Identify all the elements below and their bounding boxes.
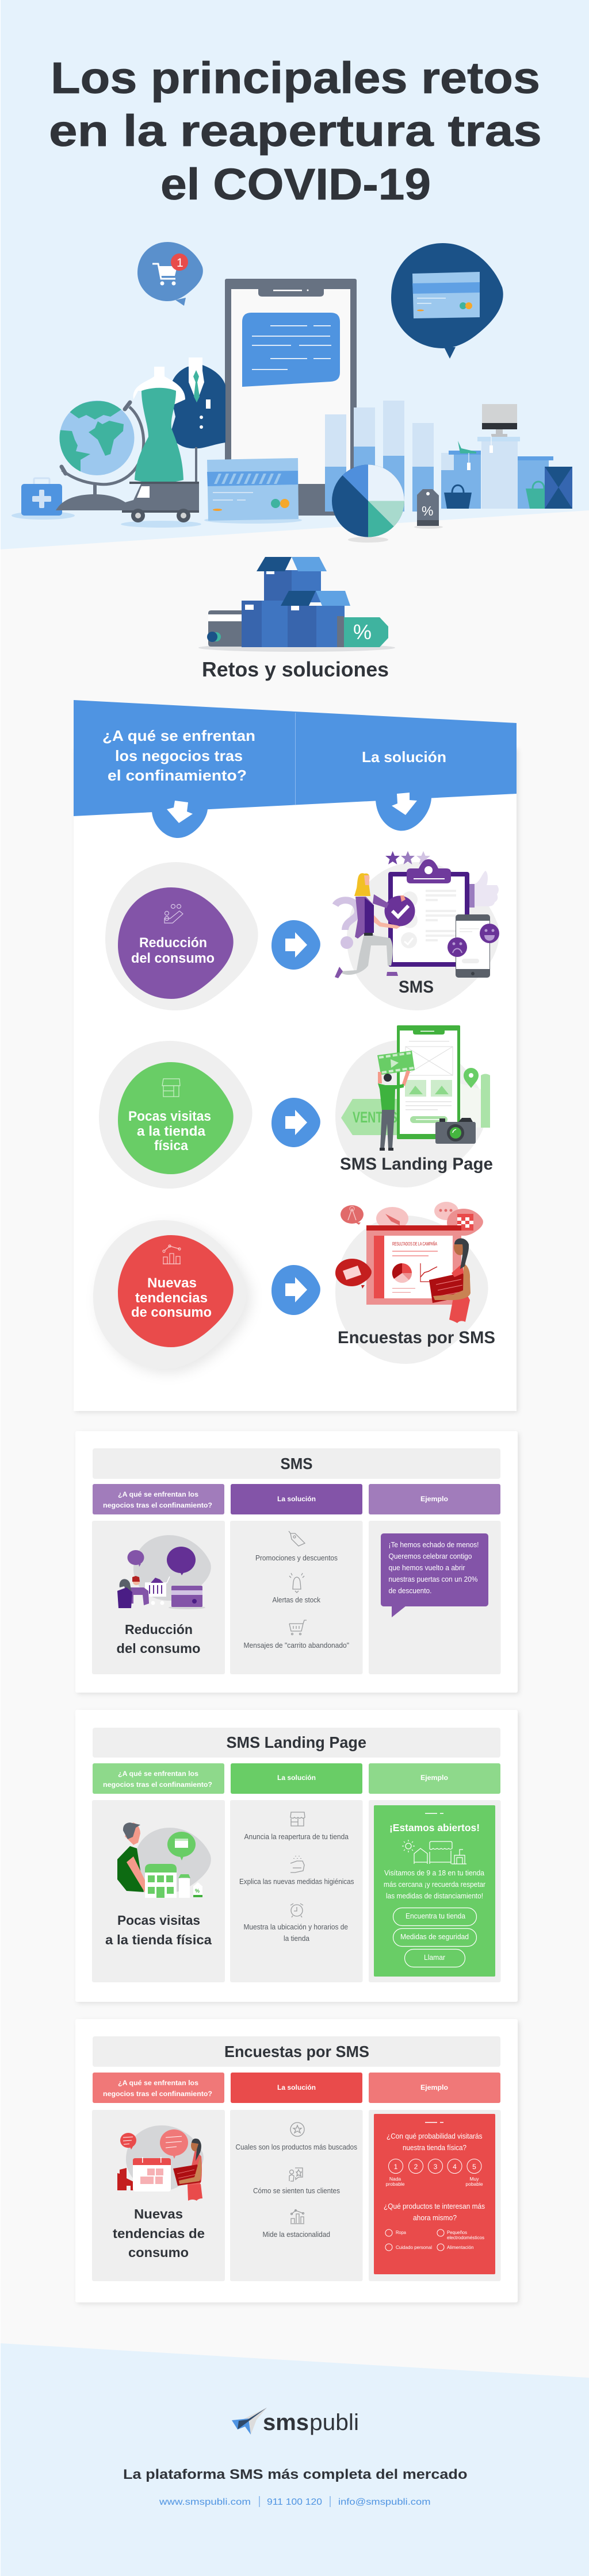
text: muestra: [244, 1923, 348, 1943]
column headers: [93, 1484, 500, 1514]
panel title: [93, 1448, 500, 1479]
rating scale: Nada: [389, 2176, 401, 2182]
challenge column: %: [195, 1888, 200, 1894]
panel: SMS detail card: [75, 1431, 518, 1693]
example column: nuestra tienda física?: [403, 2144, 466, 2152]
arrow: [271, 1098, 320, 1147]
example column: ¿Con qué probabilidad visitarás: [387, 2132, 482, 2140]
delivery truck: [121, 482, 201, 528]
text: cuales: Cuales son los productos más buscados: [236, 2143, 357, 2151]
solution: SMS illustration: [335, 851, 499, 1010]
column headers: La solución: [277, 1495, 316, 1503]
rating scale: 4: [453, 2163, 457, 2171]
column headers: negocios tras el confinamiento?: [103, 1501, 212, 1509]
challenge column: consumo: [128, 2245, 189, 2260]
tagline: La plataforma SMS más completa del mercado: [123, 2467, 467, 2482]
table header: [74, 700, 517, 838]
logo: [232, 2408, 359, 2435]
example column: ¡Te hemos echado de menos!: [389, 1541, 479, 1549]
label: SMS Landing Page: SMS Landing Page: [340, 1155, 493, 1174]
footer: [123, 2408, 467, 2507]
column headers: ¿A qué se enfrentan los: [118, 1770, 198, 1778]
example column: más cercana ¡y recuerda respetar: [384, 1881, 485, 1889]
phone: [225, 279, 357, 516]
rating scale: [385, 2159, 483, 2187]
title: el COVID-19: [160, 160, 431, 209]
dress mannequin: [133, 367, 197, 483]
text: muestra: Muestra la ubicación y horarios de: [244, 1923, 348, 1931]
logo: publi: [309, 2410, 359, 2435]
icon: clock: [290, 1904, 303, 1917]
challenge: pocas visitas: a la tienda: [137, 1124, 205, 1139]
challenge column: a la tienda física: [105, 1932, 212, 1947]
challenge: pocas visitas: física: [154, 1138, 188, 1154]
icon: price tag: [414, 489, 443, 529]
title: en la reapertura tras: [49, 106, 542, 156]
globe: [56, 401, 144, 510]
challenge column: [92, 1800, 225, 1982]
survey options: [385, 2229, 484, 2251]
table header: ¿A qué se enfrentan: [102, 727, 255, 744]
hero illustration: [12, 242, 572, 543]
solution: encuestas illustration: RESULTADOS DE LA CAMPAÑA: [392, 1241, 437, 1247]
example column: Visítamos de 9 a 18 en tu tienda: [384, 1869, 484, 1877]
icon: star circle: [290, 2123, 304, 2136]
rating scale: probable: [385, 2181, 405, 2187]
column headers: La solución: [277, 1774, 316, 1782]
example column: [369, 1521, 500, 1674]
icon: bell: [289, 1573, 304, 1593]
solution column: [230, 2110, 362, 2281]
panel title: Encuestas por SMS: [224, 2043, 369, 2060]
example column: que hemos vuelto a abrir: [389, 1564, 465, 1572]
button: medidas: [393, 1929, 476, 1946]
icon: boxes: %: [353, 620, 372, 644]
rating scale: pobable: [465, 2181, 483, 2187]
solution: landing page illustration: VENTAS: [353, 1109, 397, 1126]
solution: encuestas illustration: [335, 1202, 488, 1364]
title: Los principales retos: [51, 53, 540, 103]
icon: credit card bubble: [391, 243, 503, 359]
contact details: info@smspubli.com: [338, 2497, 430, 2507]
rating scale: Muy: [469, 2176, 479, 2182]
text: explica: Explica las nuevas medidas higiénicas: [239, 1878, 354, 1886]
icon: price tag: %: [422, 503, 433, 518]
column headers: Ejemplo: [420, 2083, 448, 2091]
text: como: Cómo se sienten tus clientes: [253, 2187, 340, 2195]
panel: challenges and solutions: [74, 700, 517, 1411]
challenge column: [92, 2110, 225, 2281]
contact details: [159, 2496, 430, 2507]
example column: nuestras puertas con un 20%: [389, 1575, 477, 1583]
text: muestra: la tienda: [284, 1935, 309, 1943]
column headers: negocios tras el confinamiento?: [103, 1781, 212, 1789]
arrow: [271, 1265, 320, 1315]
panel title: SMS: [281, 1455, 313, 1472]
example column: [369, 1800, 500, 1982]
shop boxes and monitor: [441, 404, 572, 509]
column headers: La solución: [277, 2083, 316, 2091]
column headers: Ejemplo: [420, 1495, 448, 1503]
challenge column: Reducción: [125, 1622, 193, 1637]
icon: cart bubble: [137, 242, 203, 306]
contact details: 911 100 120: [267, 2497, 322, 2507]
challenge: nuevas tendencias: tendencias: [135, 1290, 208, 1306]
credit card: [204, 458, 302, 524]
text: alertas: Alertas de stock: [273, 1596, 321, 1604]
panel: SMS landing page detail card: [75, 1710, 518, 2002]
table header: los negocios tras: [115, 747, 243, 764]
icon: boxes: [198, 557, 395, 652]
first aid kit: [12, 478, 75, 520]
icon: city shops: [402, 1840, 466, 1864]
text: promociones: Promociones y descuentos: [255, 1554, 338, 1562]
challenge: reducción del consumo: [105, 862, 258, 1010]
column headers: negocios tras el confinamiento?: [103, 2090, 212, 2098]
rating scale: 2: [414, 2163, 418, 2171]
challenge: pocas visitas: [99, 1041, 253, 1189]
panel title: [93, 1728, 500, 1758]
challenge: nuevas tendencias: [93, 1220, 247, 1369]
challenge column: Nuevas: [134, 2206, 183, 2221]
label: encuestas por SMS: Encuestas por SMS: [338, 1328, 495, 1347]
column headers: ¿A qué se enfrentan los: [118, 1490, 198, 1498]
solution column: [230, 1800, 362, 1982]
button: medidas: Medidas de seguridad: [400, 1933, 469, 1941]
text: mensajes: Mensajes de "carrito abandonado": [244, 1641, 349, 1650]
challenge: nuevas tendencias: de consumo: [131, 1305, 212, 1320]
example column: de descuento.: [389, 1587, 431, 1595]
column headers: Ejemplo: [420, 1774, 448, 1782]
example column: ¡Estamos abiertos!: [389, 1822, 480, 1833]
challenge: nuevas tendencias: Nuevas: [147, 1275, 197, 1291]
challenge column: Pocas visitas: [117, 1913, 200, 1928]
challenge column: tendencias de: [113, 2226, 205, 2241]
label: SMS: SMS: [399, 978, 434, 997]
panel: encuestas por SMS detail card: [75, 2019, 518, 2302]
example column: ¿Qué productos te interesan más: [384, 2202, 485, 2210]
icon: washing hands: [290, 1856, 304, 1873]
button: encuentra: [393, 1908, 476, 1925]
survey options: Cuidado personal: [396, 2244, 432, 2250]
survey options: Alimentación: [447, 2244, 474, 2250]
text: anuncia: Anuncia la reapertura de tu tienda: [244, 1833, 349, 1841]
bar chart: [325, 401, 434, 512]
contact details: www.smspubli.com: [159, 2497, 251, 2507]
icon: cart: [289, 1620, 307, 1635]
panel title: [93, 2036, 500, 2067]
column headers: [93, 2073, 500, 2103]
example column: [369, 2110, 500, 2281]
icon: customer opinion: [289, 2168, 303, 2181]
solution column: [230, 1521, 362, 1674]
icon: cart bubble: 1: [177, 256, 183, 270]
icon: store: [290, 1812, 305, 1826]
example column: Queremos celebrar contigo: [389, 1552, 472, 1560]
table header: La solución: [362, 748, 446, 766]
rating scale: 1: [394, 2163, 398, 2171]
column headers: [93, 1763, 500, 1794]
column headers: ¿A qué se enfrentan los: [118, 2079, 198, 2087]
challenge column: [92, 1521, 225, 1674]
challenge: reducción del consumo: Reducción: [139, 935, 207, 951]
table header: el confinamiento?: [108, 767, 247, 784]
survey options: Pequeños: [447, 2229, 467, 2235]
rating scale: 5: [472, 2163, 476, 2171]
text: mide: Mide la estacionalidad: [262, 2231, 330, 2239]
heading: retos y soluciones: Retos y soluciones: [202, 658, 389, 681]
icon: seasonality chart: [290, 2209, 304, 2224]
example column: ahora mismo?: [413, 2214, 457, 2222]
icon: tag: [289, 1531, 305, 1546]
solution: landing page illustration: [335, 1025, 490, 1187]
pie chart: [332, 464, 404, 543]
challenge column: del consumo: [116, 1641, 200, 1656]
challenge: pocas visitas: Pocas visitas: [128, 1109, 211, 1124]
survey options: Ropa: [396, 2229, 406, 2235]
title: [49, 53, 542, 209]
panel title: SMS Landing Page: [227, 1733, 366, 1751]
logo: sms: [263, 2410, 309, 2435]
button: llamar: Llamar: [424, 1954, 445, 1962]
button: llamar: [405, 1950, 465, 1967]
example column: las medidas de distanciamiento!: [386, 1892, 483, 1900]
suit on hanger: [170, 357, 225, 448]
arrow: [271, 920, 320, 970]
challenge: reducción del consumo: del consumo: [131, 951, 215, 966]
survey options: electrodomésticos: [447, 2235, 484, 2240]
button: encuentra: Encuentra tu tienda: [406, 1912, 465, 1920]
rating scale: 3: [434, 2163, 438, 2171]
